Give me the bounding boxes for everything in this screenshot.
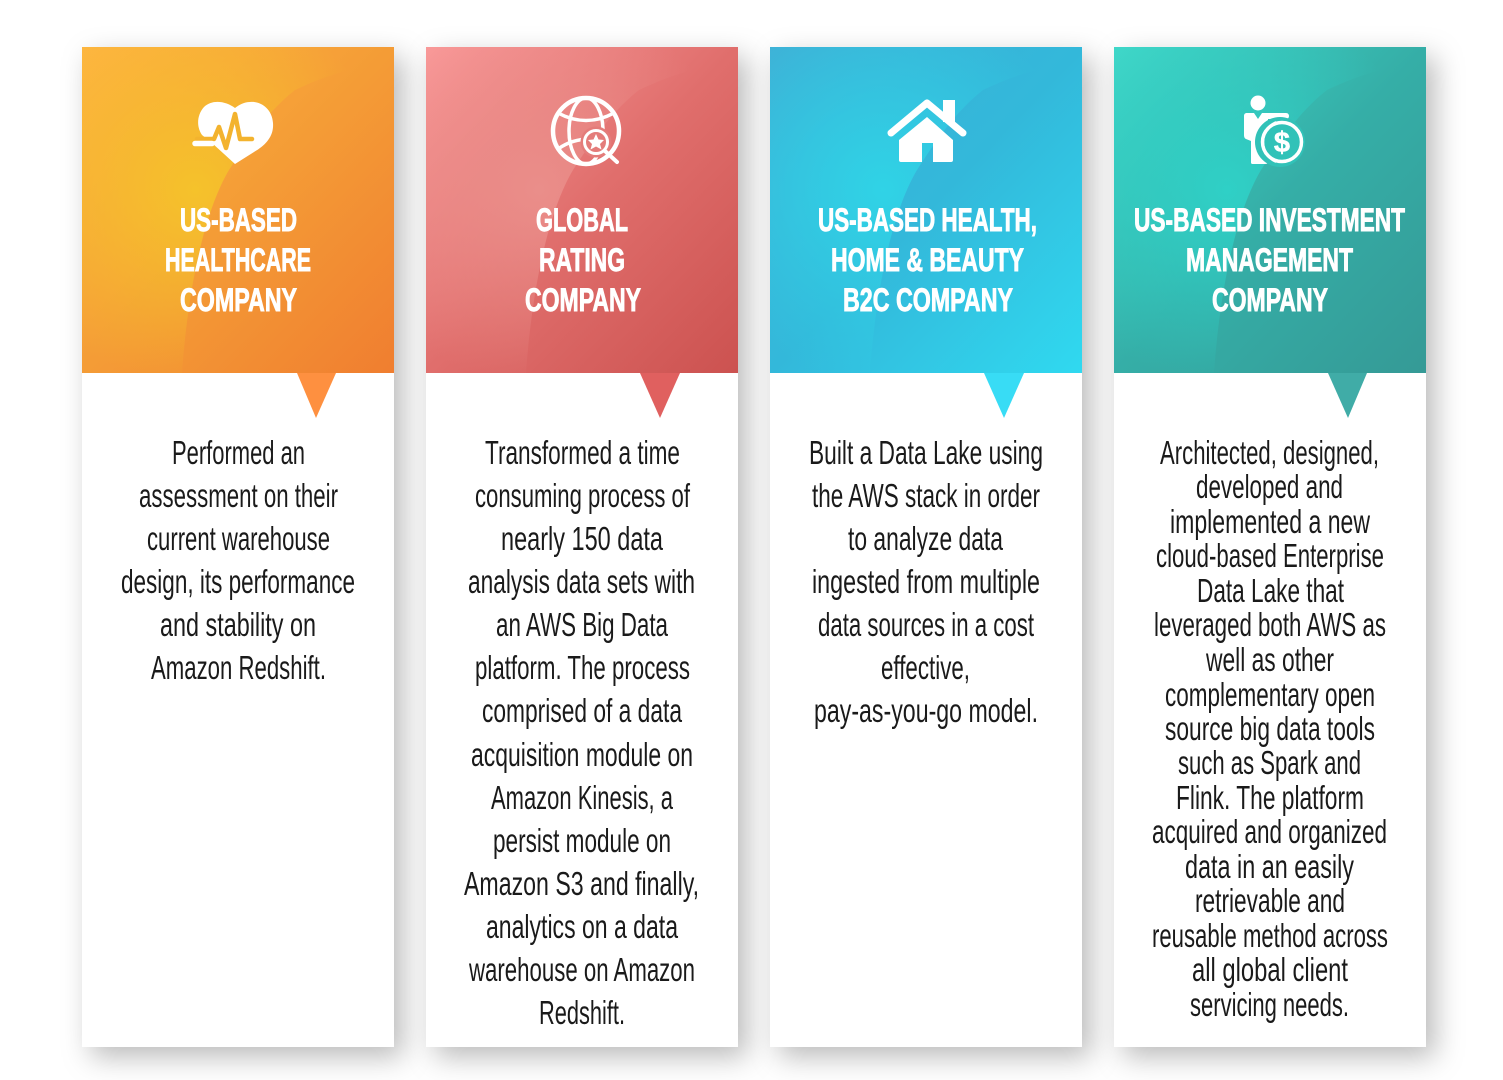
description text: nearly 150 data	[501, 520, 663, 557]
heading: HEALTHCARE	[165, 242, 311, 278]
description text: an AWS Big Data	[496, 606, 668, 643]
heading	[1134, 202, 1405, 318]
description text: Amazon Redshift.	[151, 649, 326, 686]
pointer triangle	[1328, 373, 1367, 418]
description text	[464, 434, 699, 1031]
description text: Data Lake that	[1197, 572, 1344, 609]
description text: the AWS stack in order	[812, 477, 1040, 514]
heading: MANAGEMENT	[1186, 242, 1353, 278]
heading	[525, 202, 641, 318]
description text: complementary open	[1165, 676, 1375, 713]
heading: COMPANY	[180, 282, 297, 318]
pointer triangle	[297, 373, 336, 418]
description text: ingested from multiple	[812, 563, 1040, 600]
heading: RATING	[539, 242, 625, 278]
icon: businessman with dollar coin: $	[1274, 127, 1290, 159]
panel: US-based investment management company	[1114, 47, 1426, 1047]
coloured header	[82, 47, 394, 373]
description text: Redshift.	[539, 994, 625, 1031]
description text	[121, 434, 355, 686]
description text: such as Spark and	[1178, 744, 1361, 781]
heading	[165, 202, 311, 318]
description text: implemented a new	[1170, 503, 1370, 540]
description text: to analyze data	[848, 520, 1003, 557]
icon: heart with pulse	[195, 102, 273, 164]
description text: leveraged both AWS as	[1154, 606, 1386, 643]
description text: design, its performance	[121, 563, 355, 600]
heading: COMPANY	[525, 282, 641, 318]
heading: B2C COMPANY	[843, 282, 1013, 318]
description text: data in an easily	[1185, 848, 1354, 885]
description text: assessment on their	[139, 477, 338, 514]
description text: analysis data sets with	[468, 563, 695, 600]
description text: pay-as-you-go model.	[814, 692, 1038, 729]
description text: platform. The process	[475, 649, 690, 686]
panel: global rating company	[426, 47, 738, 1047]
description text: Transformed a time	[485, 434, 680, 471]
description text: data sources in a cost	[818, 606, 1034, 643]
description text: well as other	[1205, 641, 1334, 678]
description text: analytics on a data	[486, 908, 678, 945]
coloured header	[426, 47, 738, 373]
description text: persist module on	[493, 822, 671, 859]
description text: Built a Data Lake using	[809, 434, 1043, 471]
description text	[809, 434, 1043, 729]
pointer triangle	[640, 373, 680, 418]
panel: US-based health, home and beauty B2C company	[770, 47, 1082, 1047]
description text: Amazon S3 and finally,	[464, 865, 699, 902]
heading: GLOBAL	[536, 202, 628, 238]
description text: Amazon Kinesis, a	[491, 779, 673, 816]
description text: retrievable and	[1195, 882, 1345, 919]
description text: Flink. The platform	[1176, 779, 1364, 816]
description text: servicing needs.	[1190, 986, 1349, 1023]
heading: HOME & BEAUTY	[831, 242, 1024, 278]
coloured header	[1114, 47, 1426, 373]
description text: reusable method across	[1152, 917, 1388, 954]
panel: US-based healthcare company	[82, 47, 394, 1047]
description text: and stability on	[160, 606, 316, 643]
icon: businessman with dollar coin	[1244, 96, 1305, 167]
description text: all global client	[1192, 951, 1348, 988]
description text: effective,	[881, 649, 970, 686]
heading: COMPANY	[1212, 282, 1328, 318]
heading	[818, 202, 1037, 318]
description text: Performed an	[172, 434, 305, 471]
icon: house	[891, 100, 963, 162]
description text: consuming process of	[475, 477, 691, 514]
heading: US-BASED	[180, 202, 297, 238]
description text: comprised of a data	[482, 692, 682, 729]
description text: warehouse on Amazon	[468, 951, 695, 988]
pointer triangle	[984, 373, 1024, 418]
description text: source big data tools	[1165, 710, 1375, 747]
description text: acquired and organized	[1152, 813, 1387, 850]
heading: US-BASED HEALTH,	[818, 202, 1037, 238]
description text: cloud-based Enterprise	[1156, 537, 1384, 574]
description text	[1152, 434, 1388, 1023]
description text: current warehouse	[147, 520, 330, 557]
description text: acquisition module on	[471, 736, 693, 773]
coloured header	[770, 47, 1082, 373]
description text: Architected, designed,	[1160, 434, 1379, 471]
icon: globe with magnifier and star	[553, 98, 619, 164]
description text: developed and	[1196, 468, 1343, 505]
